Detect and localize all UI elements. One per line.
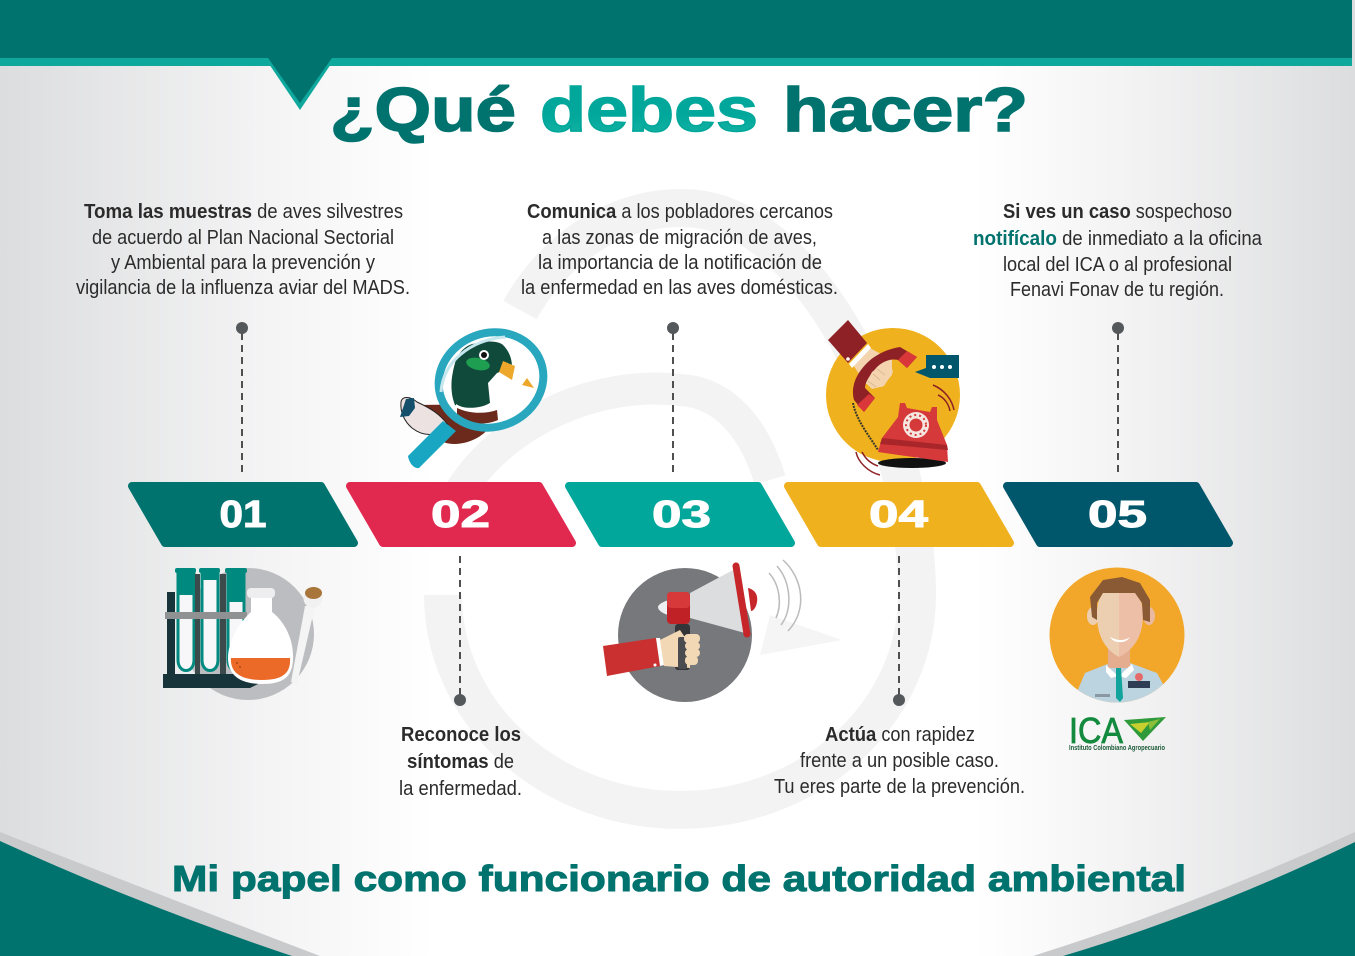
step 3 text: a las zonas de migración de aves, — [542, 227, 817, 249]
step badge 03: 03 — [652, 494, 711, 536]
ICA logo: Instituto Colombiano Agropecuario — [1069, 745, 1165, 752]
ICA logo — [1069, 710, 1166, 752]
bottom corner right — [1033, 832, 1355, 956]
icon: megaphone — [603, 560, 801, 702]
connector 1 — [236, 322, 248, 472]
connector 5 — [1112, 322, 1124, 472]
title — [330, 76, 1028, 145]
step badge 04 — [788, 486, 1010, 543]
ICA logo: ICA — [1069, 710, 1123, 751]
step badge 03 — [569, 486, 791, 543]
step badge 04: 04 — [869, 494, 928, 536]
step 1 text — [76, 201, 410, 299]
title: hacer? — [783, 76, 1028, 145]
step 2 text: la enfermedad. — [399, 778, 522, 800]
icon: lab flask and test tubes — [163, 568, 325, 700]
connector 2 — [454, 556, 466, 706]
step 5 text: notifícalo de inmediato a la oficina — [973, 228, 1263, 250]
icon: professional avatar — [1050, 568, 1184, 705]
step badge 01: 01 — [220, 494, 266, 536]
step 1 text: vigilancia de la influenza aviar del MADS. — [76, 277, 410, 299]
connector 4 — [893, 556, 905, 706]
step 3 text: la importancia de la notificación de — [538, 252, 822, 274]
step 2 text: Reconoce los — [401, 724, 521, 746]
step badge 02 — [350, 486, 572, 543]
step 5 text: local del ICA o al profesional — [1003, 254, 1232, 276]
step 1 text: de acuerdo al Plan Nacional Sectorial — [92, 227, 394, 249]
step 3 text — [521, 201, 838, 299]
step 3 text: Comunica a los pobladores cercanos — [527, 201, 833, 223]
title: ¿Qué — [330, 76, 516, 145]
step 5 text: Si ves un caso sospechoso — [1003, 201, 1232, 223]
step 4 text — [774, 724, 1025, 798]
step 5 text: Fenavi Fonav de tu región. — [1010, 279, 1224, 301]
step 2 text: síntomas de — [407, 751, 514, 773]
step badge 01 — [132, 486, 354, 543]
footer heading: Mi papel como funcionario de autoridad ambiental — [172, 858, 1186, 899]
step 4 text: frente a un posible caso. — [800, 750, 999, 772]
step 2 text — [399, 724, 522, 800]
step 4 text: Actúa con rapidez — [825, 724, 975, 746]
step badge 05: 05 — [1088, 494, 1147, 536]
step 3 text: la enfermedad en las aves domésticas. — [521, 277, 838, 299]
top band — [0, 0, 1352, 110]
step badge 05 — [1007, 486, 1229, 543]
watermark logo — [443, 208, 917, 810]
bottom corner left — [0, 832, 320, 956]
icon: duck under magnifying glass — [400, 318, 557, 468]
step 5 text — [973, 201, 1263, 301]
step badge 02: 02 — [431, 494, 490, 536]
connector 3 — [667, 322, 679, 472]
icon: telephone — [826, 320, 960, 475]
step 1 text: y Ambiental para la prevención y — [111, 252, 375, 274]
step 1 text: Toma las muestras de aves silvestres — [84, 201, 403, 223]
step 4 text: Tu eres parte de la prevención. — [774, 776, 1025, 798]
title: debes — [540, 76, 758, 145]
